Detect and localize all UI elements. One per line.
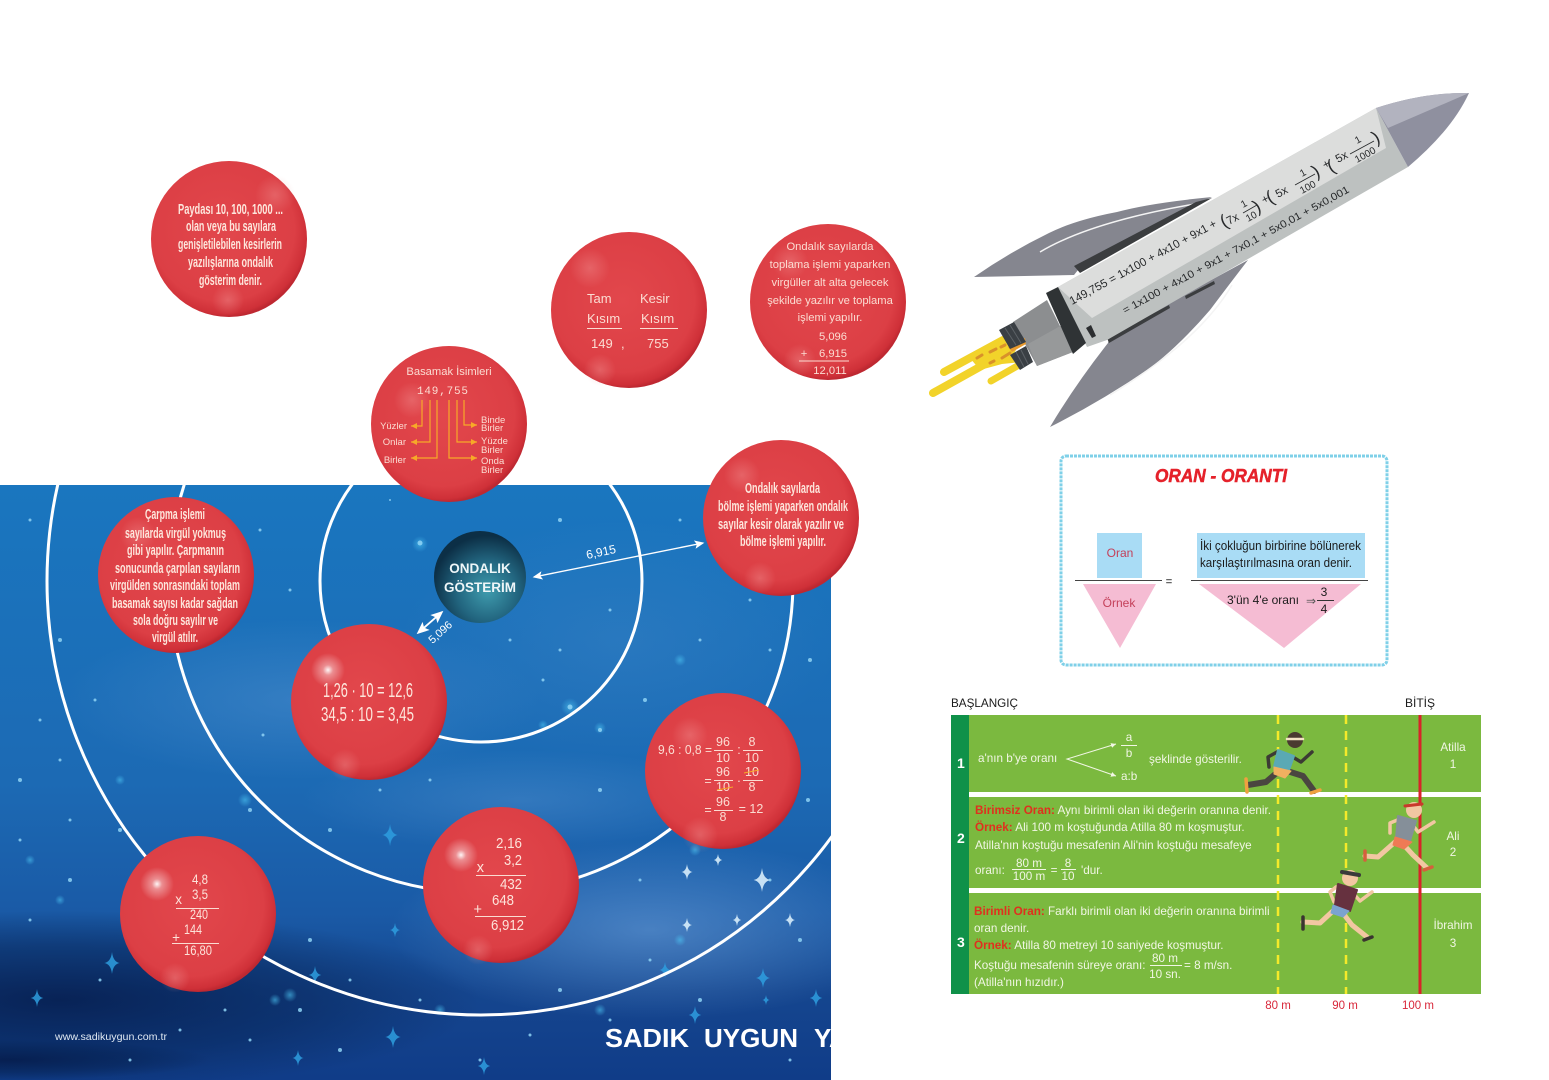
lane 2 text: Atilla'nın koştuğu mesafenin Ali'nin koştuğu mesafeye: [975, 839, 1252, 852]
sphere: basamak isimleri: Birler: [481, 423, 503, 434]
center planet: ondalık gösterim: ONDALIK: [449, 561, 511, 576]
footer publisher: SADIK: [605, 1023, 689, 1053]
sphere: tam kısım ve kesir kısım: [551, 232, 707, 388]
sphere: çarpma işlemi 4,8 x 3,5: 3,5: [192, 887, 208, 902]
orbit rings: [46, 485, 831, 1016]
sphere: basamak isimleri: Yüzde: [481, 436, 508, 447]
sphere: çarpma işlemi 2,16 x 3,2: x: [477, 860, 485, 876]
rocket: formula line one: +: [1260, 193, 1272, 207]
sphere: toplama: +: [801, 348, 807, 360]
sphere: toplama: toplama işlemi yaparken: [770, 259, 890, 271]
sphere: bölme: Ondalık sayılarda: [745, 481, 821, 497]
rocket: formula line one: +: [1321, 158, 1333, 172]
lane 3 text: oran denir.: [974, 922, 1029, 935]
sphere: kesirli bölme: 96: [716, 735, 730, 749]
sphere: definition: gösterim denir.: [199, 273, 262, 289]
center planet: ondalık gösterim: [434, 531, 526, 623]
sphere: kesirli bölme: 8: [749, 780, 756, 794]
rocket: formula line one: (: [1262, 187, 1277, 208]
footer publisher: UYGUN: [704, 1023, 798, 1053]
panel: oran orantı: [1061, 456, 1387, 665]
sphere: kesirli bölme: 8: [749, 735, 756, 749]
arrow: 5,096 distance: 5,096: [426, 619, 455, 646]
lane 2 text: 8: [1065, 857, 1071, 870]
sphere: çarpma işlemi 2,16 x 3,2: 648: [492, 893, 514, 909]
race track panel: [951, 696, 1481, 1012]
sphere: basamak isimleri: 149,755: [417, 386, 469, 398]
sphere: tam kısım ve kesir kısım: 149: [591, 336, 613, 351]
sphere: çarpma: sayılarda virgül yokmuş: [125, 526, 226, 542]
sphere: basamak isimleri: Yüzler: [380, 421, 407, 432]
sphere: basamak isimleri: Birler: [384, 455, 406, 466]
sphere: kesirli bölme: = 12: [739, 802, 763, 816]
rocket: formula line one: 1: [1298, 167, 1309, 180]
runner: atilla: [1246, 732, 1320, 793]
footer website: www.sadikuygun.com.tr: [54, 1032, 168, 1043]
sphere: çarpma işlemi 2,16 x 3,2: 2,16: [496, 836, 522, 852]
distance labels: 90 m: [1332, 1000, 1358, 1012]
rocket: top fin: [974, 197, 1212, 277]
sphere: definition: [151, 161, 307, 317]
sphere: çarpma işlemi 2,16 x 3,2: +: [474, 902, 482, 918]
lane 3 text: Örnek: Atilla 80 metreyi 10 saniyede koşmuştur.: [974, 939, 1223, 952]
sphere: 10 ile çarpma bölme: [291, 624, 447, 781]
distance labels: [1265, 1000, 1434, 1012]
lane 2 text: 100 m: [1013, 870, 1045, 883]
sphere: çarpma işlemi 4,8 x 3,5: [120, 836, 276, 993]
example triangle: [1199, 584, 1361, 648]
sphere: toplama: 5,096: [819, 331, 847, 343]
sphere: 10 ile çarpma bölme: 1,26 · 10 = 12,6: [323, 680, 413, 702]
footer publisher: [606, 1028, 831, 1048]
lane numbers: [957, 755, 965, 950]
rocket: nose: [1376, 93, 1469, 167]
sphere: kesirli bölme: :: [737, 743, 741, 757]
lane 2 text: 10: [1061, 870, 1075, 883]
sphere: çarpma işlemi 4,8 x 3,5: 144: [184, 922, 202, 937]
sphere: kesirli bölme: 10: [745, 765, 759, 779]
rocket: formula line one: 1: [1353, 134, 1364, 147]
sphere: çarpma işlemi 2,16 x 3,2: [423, 807, 579, 965]
sphere: kesirli bölme: ·: [737, 774, 741, 788]
sphere: toplama: işlemi yapılır.: [798, 312, 862, 324]
oran definition box: karşılaştırılmasına oran denir.: [1200, 556, 1352, 570]
runner names: Atilla: [1440, 741, 1466, 754]
örnek triangle: [1083, 584, 1156, 648]
örnek triangle: Örnek: [1103, 596, 1136, 610]
runner names: 2: [1450, 846, 1456, 859]
rocket: formula line one: ): [1249, 196, 1264, 217]
heading: oran orantı: ORAN - ORANTI: [1155, 466, 1288, 486]
distance labels: 100 m: [1402, 1000, 1434, 1012]
sphere: tam kısım ve kesir kısım: Kısım: [641, 311, 674, 326]
labels: start finish: BİTİŞ: [1405, 696, 1435, 710]
sphere: tam kısım ve kesir kısım: ,: [621, 336, 625, 351]
lane 2 text: [975, 804, 1271, 883]
sphere: çarpma: [98, 497, 254, 653]
rocket: formula line one: ): [1368, 127, 1383, 148]
sphere: basamak isimleri: Onda: [481, 456, 505, 467]
sphere: toplama: 6,915: [819, 348, 847, 360]
sphere: definition: olan veya bu sayılara: [186, 219, 277, 235]
center planet: ondalık gösterim: GÖSTERİM: [444, 580, 516, 595]
oran definition box: [1197, 533, 1365, 578]
lane 3 text: 10 sn.: [1149, 968, 1181, 981]
rocket: formula line one: 1: [1239, 198, 1250, 211]
sphere: bölme: sayılar kesir olarak yazılır ve: [718, 517, 844, 533]
sphere: çarpma işlemi 4,8 x 3,5: 4,8: [192, 872, 208, 887]
sphere: basamak isimleri: [371, 346, 527, 502]
sphere: kesirli bölme: 8: [720, 810, 727, 824]
sphere: tam kısım ve kesir kısım: Tam: [587, 291, 612, 306]
runner names: 1: [1450, 758, 1456, 771]
lane 3 text: (Atilla'nın hızıdır.): [974, 976, 1064, 989]
footer publisher: YAY: [814, 1023, 863, 1053]
lane 3 text: 80 m: [1152, 952, 1178, 965]
sphere: kesirli bölme: 10: [716, 751, 730, 765]
sphere: basamak isimleri: Onlar: [383, 437, 406, 448]
lane numbers: 2: [957, 830, 965, 846]
sphere: çarpma: sola doğru sayılır ve: [133, 613, 218, 629]
sphere: çarpma işlemi 2,16 x 3,2: 6,912: [491, 918, 524, 934]
sphere: çarpma işlemi 2,16 x 3,2: 432: [500, 877, 522, 893]
panel: space background: [0, 147, 915, 1080]
rocket: formula line two: = 1x100 + 4x10 + 9x1 + 7x0,1 + 5x0,01 + 5x0,001: [1121, 184, 1352, 317]
sphere: basamak isimleri: Birler: [481, 465, 503, 476]
runner: ali: [1365, 802, 1434, 870]
lane 3 text: [974, 905, 1270, 989]
runner names: 3: [1450, 937, 1456, 950]
example triangle: 3'ün 4'e oranı: [1227, 593, 1299, 607]
lane 2 text: =: [1051, 864, 1058, 877]
rocket: formula line one: (: [1216, 211, 1231, 232]
sphere: kesirli bölme: =: [704, 774, 712, 788]
sphere: toplama: virgüller alt alta gelecek: [772, 277, 889, 289]
sphere: kesirli bölme: =: [704, 803, 712, 817]
sphere: bölme: [703, 440, 859, 596]
rocket: formula line one: 5x: [1274, 184, 1290, 201]
arrow: 5,096 distance: [418, 612, 455, 646]
sphere: basamak isimleri: Birler: [481, 445, 503, 456]
lane 1 text: a:b: [1121, 770, 1138, 783]
lane 2 text: 80 m: [1016, 857, 1042, 870]
lane 3 text: Birimli Oran: Farklı birimli olan iki değerin oranına birimli: [974, 905, 1270, 918]
sphere: definition: genişletilebilen kesirlerin: [178, 237, 282, 253]
sphere: çarpma işlemi 4,8 x 3,5: x: [175, 892, 182, 907]
sphere: kesirli bölme: [645, 693, 801, 853]
example triangle: 4: [1321, 602, 1328, 616]
rocket: formula line one: [1068, 127, 1383, 308]
runner names: İbrahim: [1434, 919, 1472, 932]
lane 1 text: b: [1126, 747, 1133, 760]
sphere: çarpma: gibi yapılır. Çarpmanın: [127, 543, 224, 559]
example triangle: 3: [1321, 585, 1328, 599]
sphere: toplama: şekilde yazılır ve toplama: [767, 295, 894, 307]
rocket: formula line one: 100: [1298, 179, 1318, 197]
oran box: Oran: [1107, 546, 1133, 560]
lane numbers: 3: [957, 934, 965, 950]
sphere: tam kısım ve kesir kısım: Kısım: [587, 311, 620, 326]
sphere: bölme: bölme işlemi yaparken ondalık: [718, 499, 849, 515]
oran box: [1097, 533, 1142, 578]
runner names: [1434, 741, 1472, 950]
sphere: 10 ile çarpma bölme: 34,5 : 10 = 3,45: [321, 704, 414, 726]
sphere: definition: yazılışlarına ondalık: [188, 255, 274, 271]
sphere: çarpma: Çarpma işlemi: [145, 507, 205, 523]
sphere: tam kısım ve kesir kısım: 755: [647, 336, 669, 351]
sphere: çarpma: sonucunda çarpılan sayıların: [115, 561, 240, 577]
lane 2 text: Örnek: Ali 100 m koştuğunda Atilla 80 m koşmuştur.: [975, 821, 1245, 834]
sphere: tam kısım ve kesir kısım: Kesir: [640, 291, 670, 306]
sphere: kesirli bölme: 10: [745, 751, 759, 765]
sphere: definition: Paydası 10, 100, 1000 ...: [178, 202, 283, 218]
lane 1 text: a'nın b'ye oranı: [978, 752, 1057, 765]
lane 2 text: oranı:: [975, 864, 1005, 877]
rocket: formula line one: 5x: [1334, 149, 1350, 166]
sphere: toplama: [750, 224, 906, 380]
rocket: [933, 93, 1469, 427]
runner names: Ali: [1446, 830, 1460, 843]
arrow: 6,915 distance: 6,915: [585, 542, 617, 562]
rocket: formula line one: 7x: [1225, 211, 1241, 228]
lane 1 text: şeklinde gösterilir.: [1149, 753, 1242, 766]
rocket: flames: [933, 337, 1022, 393]
example triangle: ⇒: [1306, 594, 1316, 608]
sphere: kesirli bölme: 96: [716, 795, 730, 809]
sphere: bölme: bölme işlemi yapılır.: [740, 534, 826, 550]
sphere: çarpma işlemi 4,8 x 3,5: +: [172, 930, 180, 945]
runner: ibrahim: [1303, 870, 1372, 940]
sphere: basamak isimleri: Basamak İsimleri: [406, 365, 492, 378]
sphere: kesirli bölme: 10: [716, 780, 730, 794]
arrow: 6,915 distance: [534, 542, 703, 577]
sphere: kesirli bölme: 9,6 : 0,8 =: [658, 743, 712, 757]
sphere: kesirli bölme: 96: [716, 765, 730, 779]
rocket: formula line one: (: [1323, 156, 1338, 177]
rocket: body: [1058, 108, 1408, 347]
rocket: engine: [999, 287, 1086, 370]
lane 3 text: = 8 m/sn.: [1184, 959, 1232, 972]
rocket: formula line one: 149,755 = 1x100 + 4x10 + 9x1 +: [1068, 218, 1219, 308]
sphere: çarpma işlemi 4,8 x 3,5: 16,80: [184, 943, 212, 958]
sphere: basamak isimleri: Binde: [481, 415, 505, 426]
sphere: çarpma işlemi 2,16 x 3,2: 3,2: [504, 853, 522, 869]
rocket: formula line one: ): [1308, 161, 1323, 182]
labels: start finish: BAŞLANGIÇ: [951, 696, 1018, 710]
lane 1 text: a: [1126, 731, 1133, 744]
lane numbers: 1: [957, 755, 965, 771]
rocket: formula line one: 1000: [1353, 145, 1378, 166]
rocket: formula line one: 10: [1244, 209, 1260, 225]
lane 2 text: Birimsiz Oran: Aynı birimli olan iki değerin oranına denir.: [975, 804, 1271, 817]
lane 3 text: Koştuğu mesafenin süreye oranı:: [974, 959, 1146, 972]
rocket: bottom fin: [1050, 260, 1248, 427]
lane 1 text: [978, 731, 1242, 783]
sphere: çarpma: virgülden sonrasındaki toplam: [110, 578, 240, 594]
sphere: toplama: Ondalık sayılarda: [786, 241, 874, 253]
distance labels: 80 m: [1265, 1000, 1291, 1012]
labels: start finish: [951, 696, 1435, 710]
sphere: çarpma: basamak sayısı kadar sağdan: [112, 596, 238, 612]
oran definition box: İki çokluğun birbirine bölünerek: [1200, 539, 1362, 553]
panel: oran orantı: =: [1166, 576, 1172, 588]
sphere: çarpma: virgül atılır.: [152, 630, 198, 646]
sphere: çarpma işlemi 4,8 x 3,5: 240: [190, 907, 208, 922]
lane 2 text: 'dur.: [1081, 864, 1103, 877]
sphere: toplama: 12,011: [813, 365, 847, 377]
